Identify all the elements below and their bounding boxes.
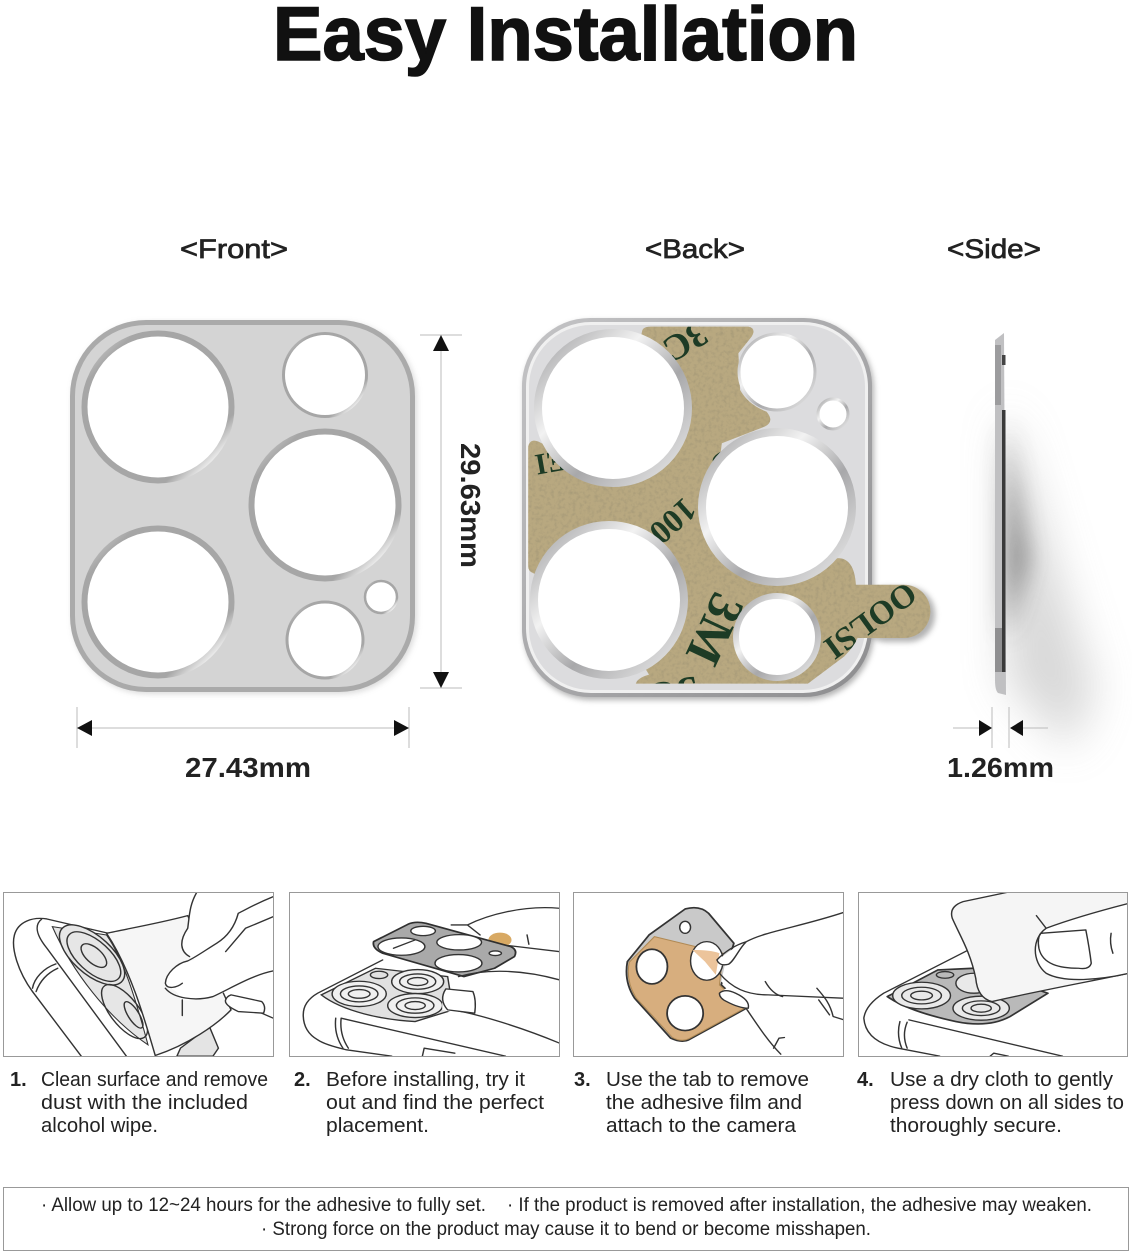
step 2 caption: 2.: [294, 1069, 311, 1091]
step 2 illustration: [290, 892, 560, 1056]
step 4 illustration: [858, 892, 1129, 1056]
step 1 caption: 1.: [10, 1069, 27, 1091]
step 2 caption: [294, 1069, 544, 1137]
step 4 caption: thoroughly secure.: [890, 1115, 1062, 1137]
width dimension: 27.43mm: 27.43mm: [185, 752, 311, 783]
step 1 caption: dust with the included: [41, 1092, 248, 1114]
heading: back: <Back>: [645, 234, 745, 264]
step 3 illustration: [574, 892, 844, 1056]
notice box: · Strong force on the product may cause it to bend or become misshapen.: [261, 1219, 871, 1240]
step 2 caption: placement.: [326, 1115, 429, 1137]
step 3 caption: attach to the camera: [606, 1115, 797, 1137]
notice box: [4, 1188, 1128, 1250]
front view plate: [70, 320, 417, 694]
width dimension: 27.43mm: [77, 707, 409, 783]
notice box: · Allow up to 12~24 hours for the adhesive to fully set.: [41, 1195, 486, 1216]
side view plate with shadow: [995, 333, 1095, 750]
step 1 caption: alcohol wipe.: [41, 1115, 158, 1137]
step 1 caption: Clean surface and remove: [41, 1069, 268, 1091]
adhesive kraft layer: 3M: [675, 585, 755, 674]
step 3 caption: [574, 1069, 809, 1137]
step 4 caption: 4.: [857, 1069, 874, 1091]
adhesive kraft layer: 100: [642, 490, 703, 551]
heading: front: <Front>: [180, 234, 288, 264]
adhesive kraft layer: 3C: [656, 313, 715, 371]
adhesive kraft layer: OOLSI: [817, 574, 924, 666]
back view plate with adhesive: [522, 313, 935, 720]
adhesive kraft layer: S: [705, 445, 739, 480]
step 3 caption: Use the tab to remove: [606, 1069, 809, 1091]
notice box: · If the product is removed after installation, the adhesive may weaken.: [507, 1195, 1092, 1216]
step 2 caption: out and find the perfect: [326, 1092, 544, 1114]
thickness dimension: 1.26mm: 1.26mm: [947, 752, 1054, 783]
step 2 caption: Before installing, try it: [326, 1069, 525, 1091]
height dimension: 29.63mm: 29.63mm: [455, 443, 486, 568]
heading: side: <Side>: [947, 234, 1041, 264]
height dimension: 29.63mm: [420, 335, 486, 688]
adhesive kraft layer: 3C: [646, 667, 702, 720]
step 1 caption: [10, 1069, 268, 1137]
step 4 caption: press down on all sides to: [890, 1092, 1124, 1114]
adhesive kraft layer: [528, 326, 930, 684]
step 3 caption: the adhesive film and: [606, 1092, 802, 1114]
step 3 caption: 3.: [574, 1069, 591, 1091]
thickness dimension: 1.26mm: [947, 707, 1054, 783]
step 4 caption: Use a dry cloth to gently: [890, 1069, 1113, 1091]
step 4 caption: [857, 1069, 1124, 1137]
step 1 illustration: [4, 892, 274, 1056]
adhesive kraft layer: EI: [532, 443, 569, 481]
